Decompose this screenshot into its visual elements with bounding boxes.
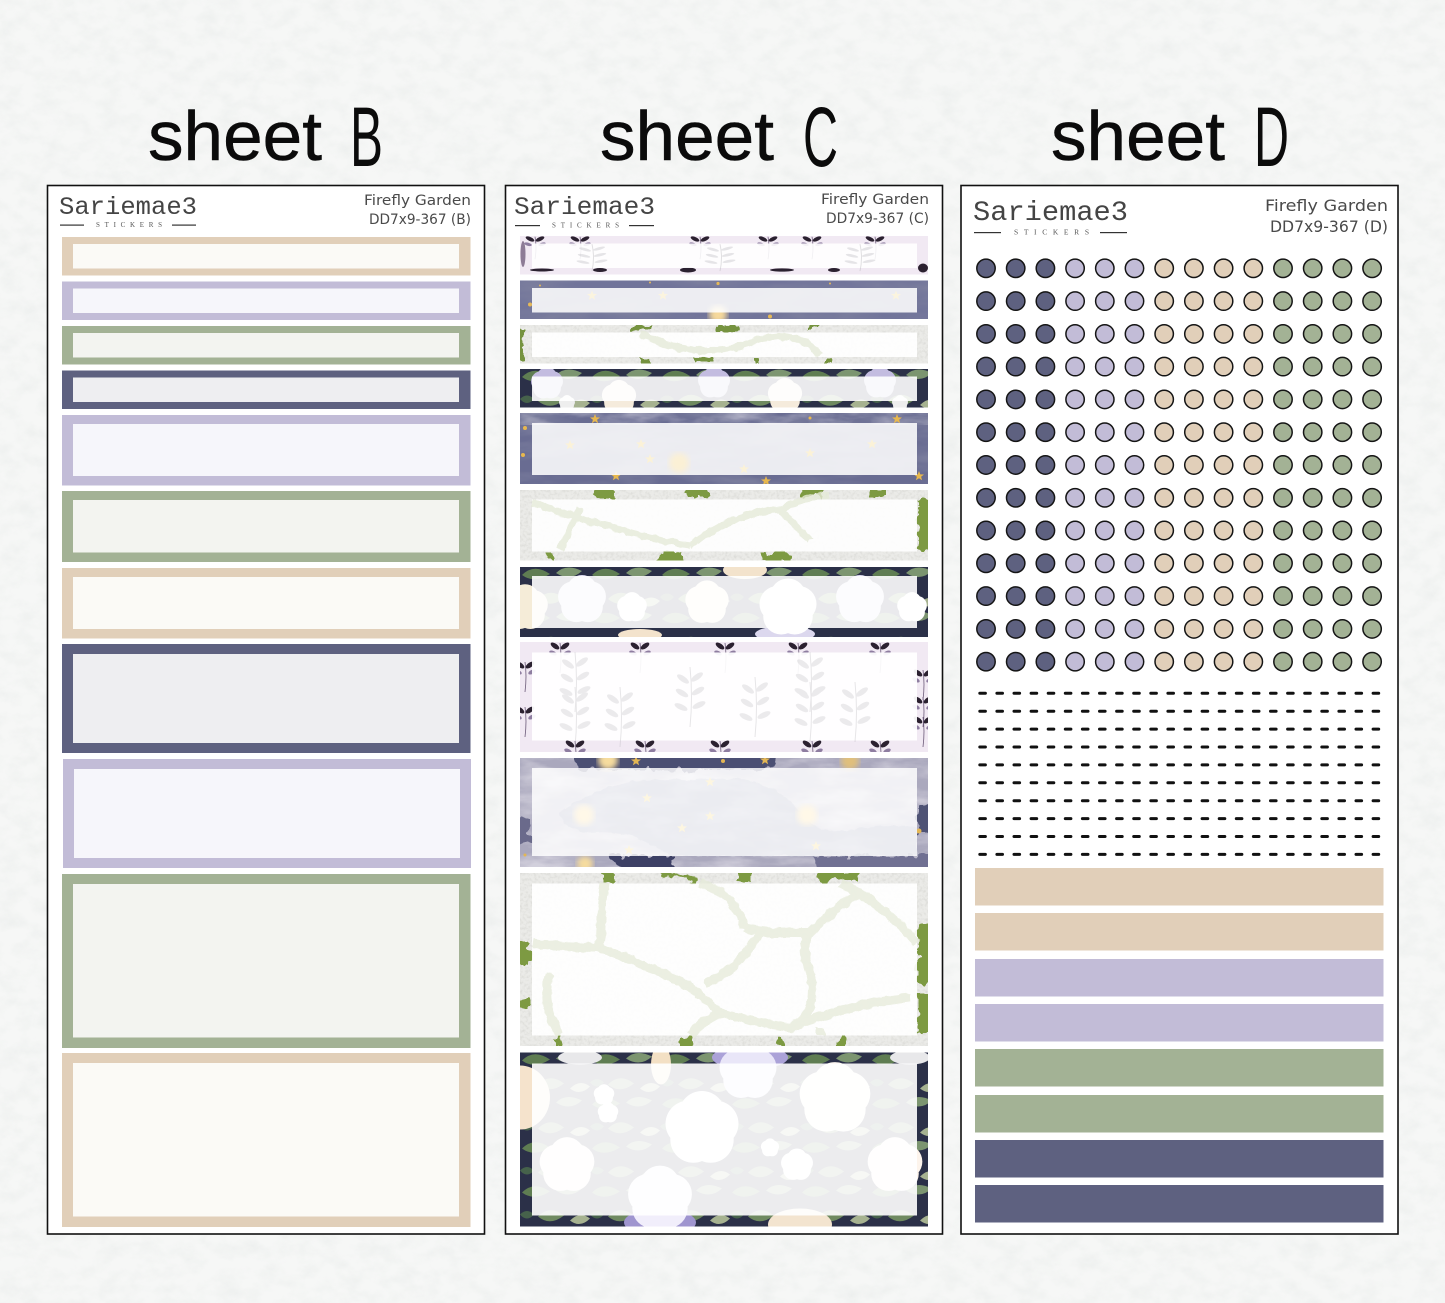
dark floral box bbox=[520, 567, 928, 637]
panel: sheet D bbox=[961, 186, 1398, 1234]
heading: sheet C bbox=[600, 90, 838, 184]
green label strip bbox=[62, 326, 470, 364]
dark floral strip bbox=[520, 369, 928, 408]
tan solid strip 1 bbox=[975, 868, 1384, 906]
mossy stone strip bbox=[520, 325, 928, 364]
panel: sheet B bbox=[48, 186, 484, 1234]
navy solid strip 1 bbox=[975, 1140, 1384, 1178]
dashed line stickers bbox=[980, 693, 1379, 854]
lavender large box bbox=[63, 759, 471, 868]
logo: Sariemae3 stickers: Sariemae3 bbox=[514, 193, 655, 222]
mossy stone large box bbox=[520, 873, 928, 1046]
heading: sheet B: B bbox=[350, 90, 383, 184]
heading: sheet B bbox=[148, 90, 383, 184]
logo: Sariemae3 stickers: STICKERS bbox=[552, 222, 619, 230]
heading: sheet D: D bbox=[1254, 90, 1289, 184]
dot sticker grid bbox=[977, 259, 1381, 671]
mossy stone box bbox=[520, 490, 928, 560]
tan medium box bbox=[62, 568, 470, 638]
lavender solid strip 2 bbox=[975, 1004, 1384, 1042]
sheet name and code: DD7x9-367 (B) bbox=[369, 212, 471, 228]
heading: sheet B: sheet bbox=[148, 97, 322, 175]
heading: sheet D bbox=[1051, 90, 1289, 184]
navy starry strip bbox=[520, 280, 928, 319]
sheet name and code bbox=[364, 193, 471, 228]
logo: Sariemae3 stickers: STICKERS bbox=[96, 221, 162, 229]
navy starry box bbox=[520, 413, 928, 484]
green extra large box bbox=[62, 874, 470, 1048]
sheet name and code: Firefly Garden bbox=[821, 192, 929, 208]
navy label strip bbox=[62, 370, 470, 409]
navy watercolor box bbox=[520, 758, 928, 867]
dark floral large box bbox=[520, 1052, 928, 1226]
green medium box bbox=[62, 491, 470, 562]
heading: sheet D: sheet bbox=[1051, 97, 1225, 175]
logo: Sariemae3 stickers: Sariemae3 bbox=[59, 193, 197, 222]
lavender solid strip 1 bbox=[975, 959, 1384, 996]
sheet name and code: DD7x9-367 (C) bbox=[826, 211, 929, 227]
sheet name and code bbox=[821, 192, 929, 227]
green solid strip 2 bbox=[975, 1095, 1384, 1132]
pink botanical box bbox=[520, 642, 928, 752]
logo: Sariemae3 stickers: Sariemae3 bbox=[973, 198, 1128, 229]
lavender label strip bbox=[62, 282, 470, 320]
navy solid strip 2 bbox=[975, 1185, 1384, 1222]
logo: Sariemae3 stickers: STICKERS bbox=[1014, 228, 1089, 236]
lavender medium box bbox=[62, 415, 470, 486]
pink botanical strip bbox=[520, 236, 928, 274]
tan label strip bbox=[62, 237, 470, 276]
heading: sheet C: C bbox=[803, 90, 838, 184]
sheet name and code bbox=[1265, 196, 1388, 236]
green solid strip 1 bbox=[975, 1049, 1384, 1086]
sheet name and code: DD7x9-367 (D) bbox=[1270, 217, 1388, 236]
panel: sheet C bbox=[490, 186, 942, 1240]
navy large box bbox=[62, 644, 470, 753]
tan extra large box bbox=[62, 1053, 470, 1227]
heading: sheet C: sheet bbox=[600, 97, 774, 175]
sheet name and code: Firefly Garden bbox=[364, 193, 471, 209]
sheet name and code: Firefly Garden bbox=[1265, 196, 1388, 215]
tan solid strip 2 bbox=[975, 913, 1384, 950]
